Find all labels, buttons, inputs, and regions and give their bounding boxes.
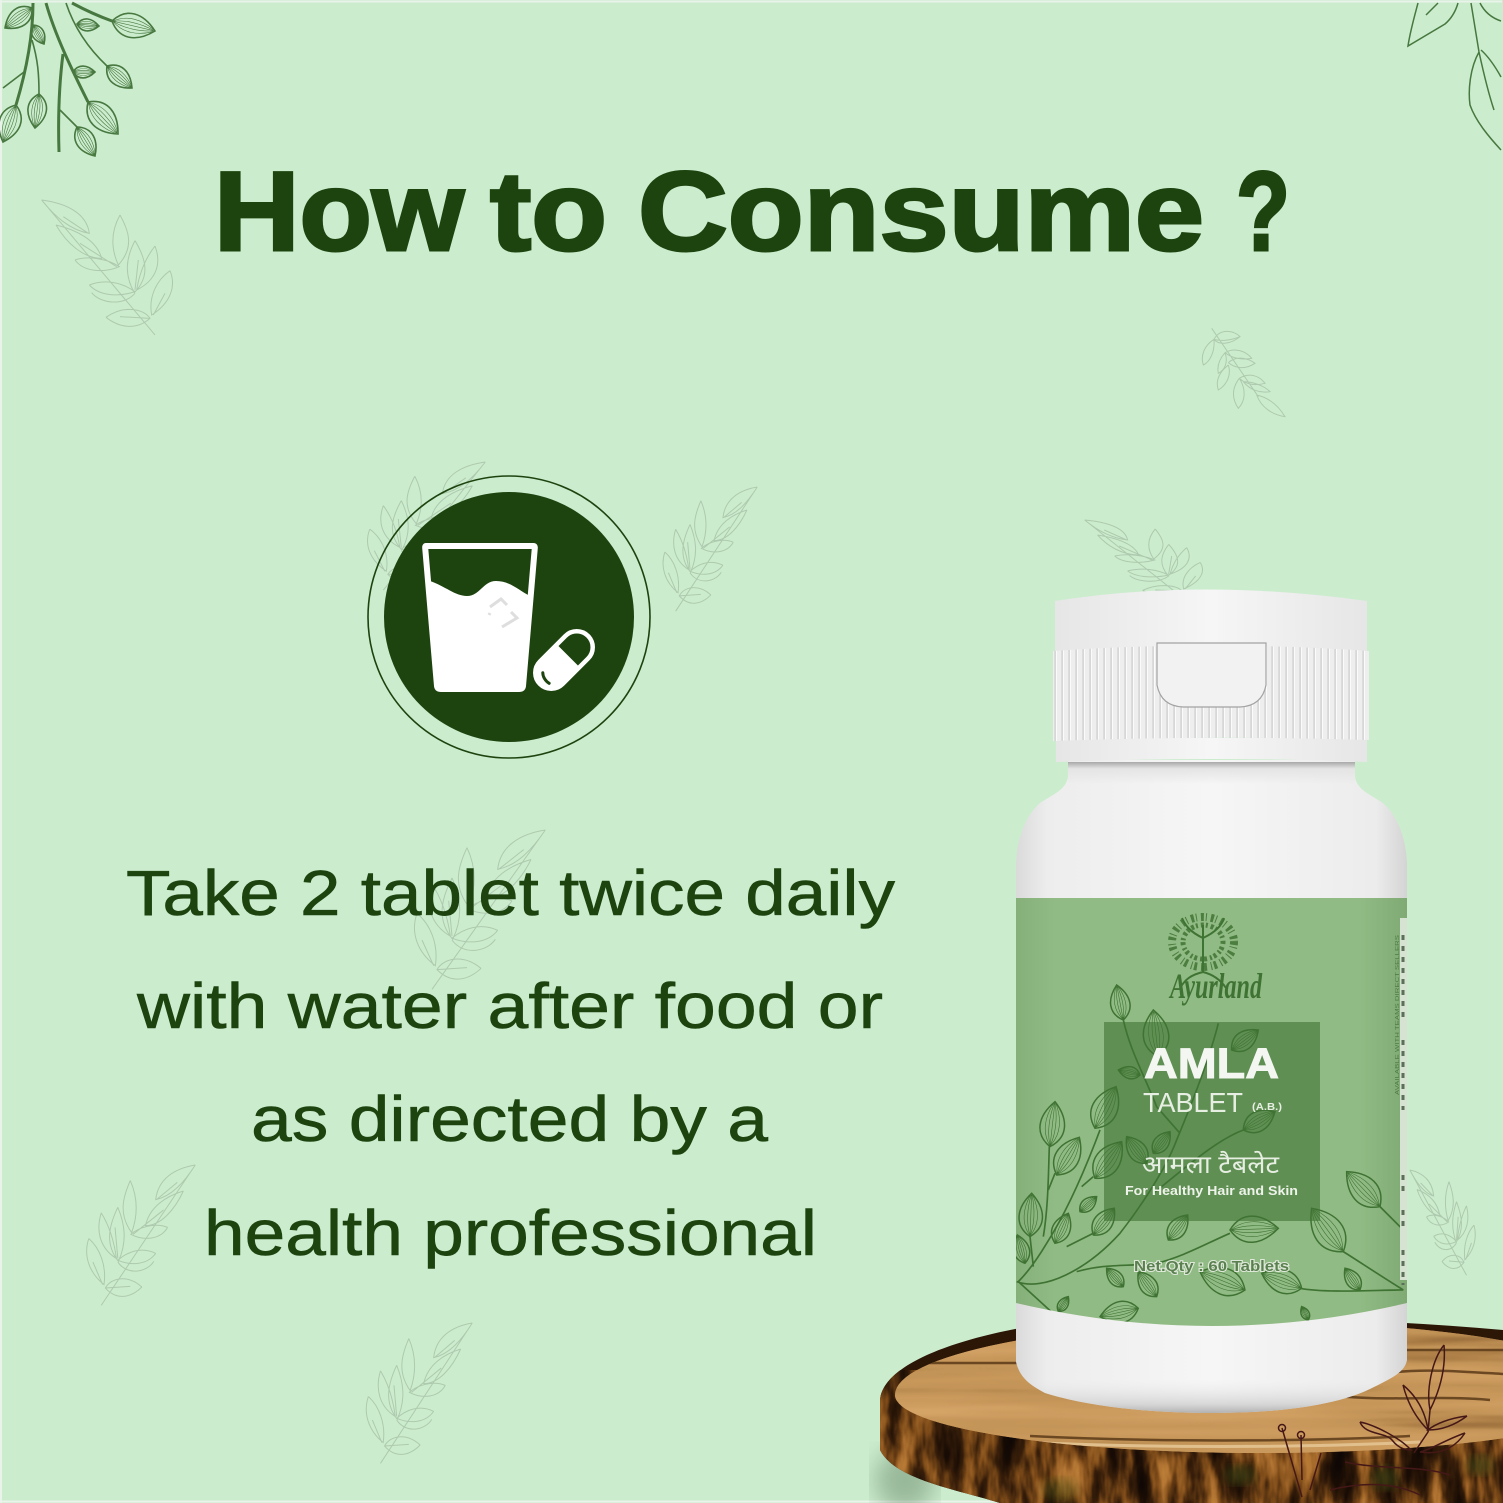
bottle body	[1016, 760, 1407, 1413]
label quantity: Net.Qty : 60 Tablets	[1134, 1259, 1289, 1275]
instruction text: health professional	[204, 1197, 817, 1269]
decoration: top-left branches	[0, 1, 158, 161]
cap top	[1055, 590, 1367, 660]
icon disc	[384, 492, 634, 742]
icon: glass of water and capsule	[368, 476, 650, 758]
label vine artwork	[1010, 983, 1403, 1327]
cap	[1053, 590, 1369, 762]
title: How	[214, 149, 465, 274]
label brand name: Ayurland	[1169, 966, 1263, 1006]
instruction text: Take 2 tablet twice daily	[126, 857, 895, 929]
title: to	[490, 149, 607, 274]
decoration: top-right branch	[1408, 3, 1501, 150]
stand shadow	[875, 1448, 935, 1503]
label side text: AVAILABLE WITH TEAMS DIRECT SELLERS	[1395, 935, 1401, 1095]
instruction text	[126, 857, 895, 1269]
label	[1010, 898, 1407, 1348]
bottle	[1010, 590, 1407, 1413]
title: ?	[1236, 149, 1290, 274]
cap lower rim	[1056, 738, 1367, 762]
instruction text: as directed by a	[251, 1083, 768, 1155]
bottle base shading	[1016, 1300, 1407, 1413]
label Hindi name: आमला टैबलेट	[1142, 1149, 1279, 1179]
cap notch	[1157, 643, 1266, 707]
label TABLET: TABLET	[1143, 1087, 1243, 1118]
glass	[425, 546, 535, 689]
bottle neck shading	[1068, 762, 1355, 784]
label benefit line: For Healthy Hair and Skin	[1125, 1184, 1298, 1198]
label ground	[1016, 898, 1407, 1348]
label side print marks	[1402, 935, 1404, 1285]
wooden stand	[870, 1310, 1503, 1503]
label A.B.: (A.B.)	[1252, 1101, 1282, 1113]
bark side	[870, 1310, 1503, 1503]
label title panel	[1104, 1022, 1320, 1221]
wood top	[895, 1328, 1503, 1453]
title: Consume	[638, 149, 1204, 274]
label side strip	[1400, 918, 1407, 1280]
instruction text: with water after food or	[136, 970, 883, 1042]
title	[214, 149, 1290, 274]
icon ring	[368, 476, 650, 758]
capsule	[529, 625, 599, 695]
label AMLA: AMLA	[1144, 1040, 1279, 1088]
label brand logo tree	[1172, 917, 1234, 988]
stand botanical overlay	[1278, 1345, 1467, 1497]
cap ribbed band	[1053, 646, 1369, 741]
